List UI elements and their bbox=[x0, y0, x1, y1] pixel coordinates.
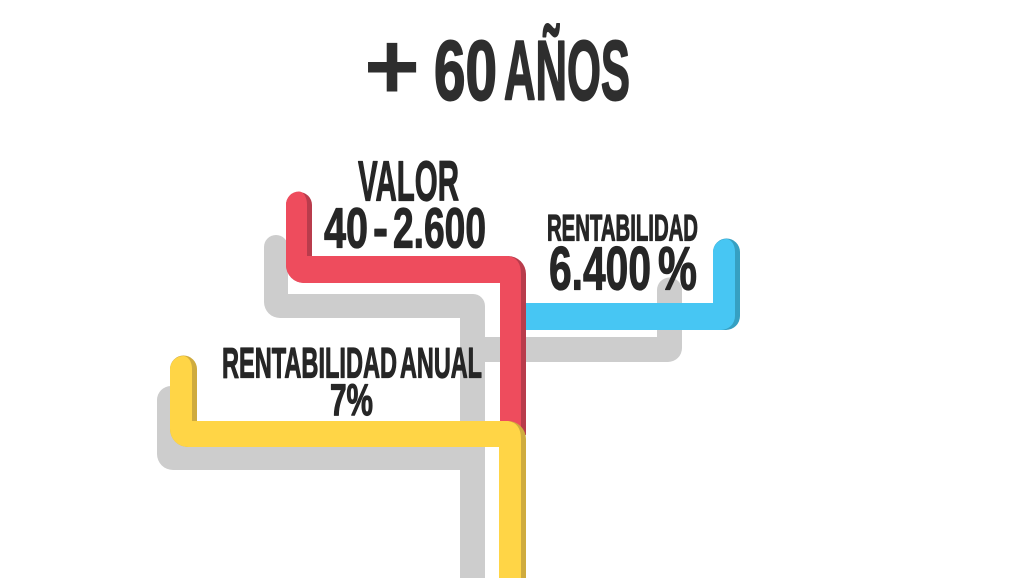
label: rentabilidad: RENTABILIDAD bbox=[547, 206, 698, 248]
grey shadow line: value bbox=[264, 235, 485, 578]
label: valor bbox=[324, 150, 486, 260]
grey shadow line: annual profitability bbox=[157, 386, 485, 578]
label: rentabilidad: % bbox=[658, 234, 697, 302]
label: rentabilidad anual: RENTABILIDAD bbox=[222, 340, 397, 388]
label: valor: 2.600 bbox=[393, 196, 486, 260]
title: 60 bbox=[434, 24, 497, 118]
blue line bbox=[526, 238, 740, 330]
grey shadow line: profitability bbox=[485, 278, 682, 362]
label: rentabilidad bbox=[547, 206, 698, 302]
label: valor: 40 bbox=[324, 196, 368, 260]
label: rentabilidad anual bbox=[222, 340, 482, 425]
title: AÑOS bbox=[504, 24, 630, 118]
yellow line bbox=[170, 356, 526, 578]
title bbox=[364, 13, 630, 120]
red line bbox=[286, 192, 526, 435]
label: valor: - bbox=[373, 196, 388, 260]
label: valor: VALOR bbox=[358, 150, 459, 214]
title: + bbox=[364, 13, 420, 120]
label: rentabilidad: 6.400 bbox=[549, 234, 651, 302]
label: rentabilidad anual: ANUAL bbox=[400, 340, 482, 388]
label: rentabilidad anual: 7% bbox=[330, 376, 373, 425]
